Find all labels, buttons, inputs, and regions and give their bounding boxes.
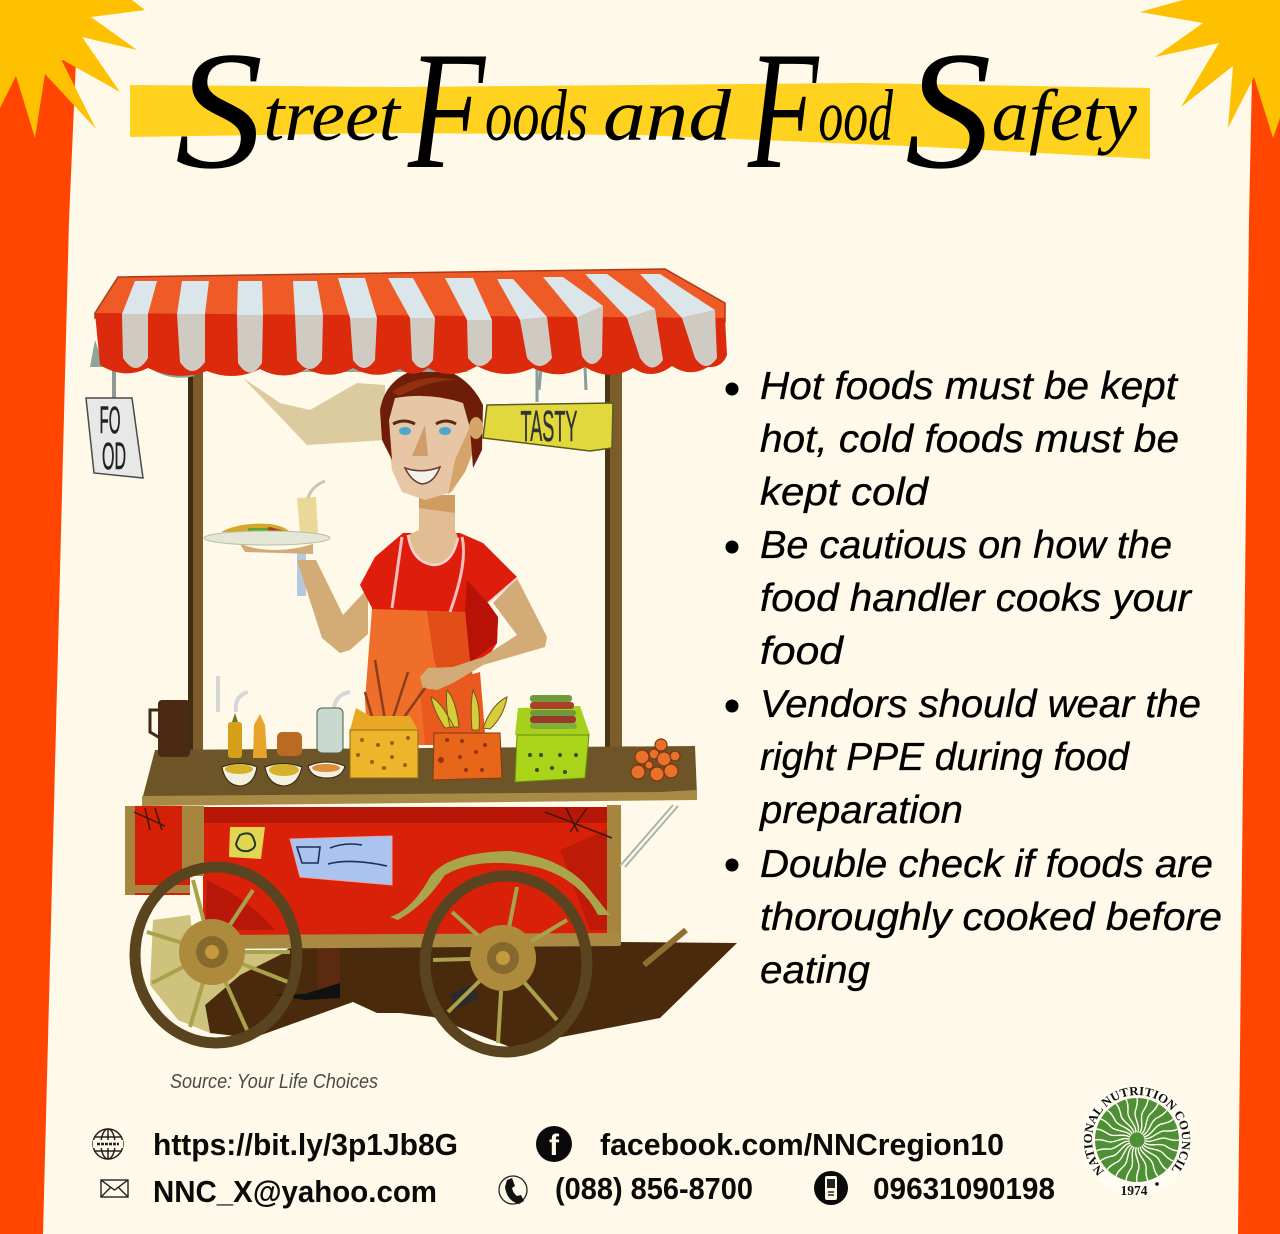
bowls [222, 762, 345, 786]
logo ring lettering: NATIONAL NUTRITION COUNCIL [1084, 1086, 1190, 1176]
right wheel [425, 876, 587, 1052]
tip 1: hot, cold foods must be [760, 418, 1179, 461]
tip 2: food [760, 630, 845, 673]
title: and [603, 75, 732, 156]
scratch marks on cart [134, 808, 612, 838]
tasty sign [483, 402, 613, 451]
tip 2: food handler cooks your [760, 577, 1193, 620]
pitcher [150, 700, 190, 757]
tabletop items [150, 660, 680, 786]
face [386, 396, 478, 500]
title: afety [992, 75, 1138, 156]
striped awning [90, 269, 727, 378]
tip 2: Be cautious on how the [760, 524, 1172, 567]
website link: https://bit.ly/3p1Jb8G [153, 1127, 458, 1162]
title: F [407, 18, 486, 205]
logo founding year: 1974 [1120, 1183, 1148, 1198]
tip 4: thoroughly cooked before [760, 896, 1222, 939]
facebook address: facebook.com/NNCregion10 [600, 1127, 1004, 1162]
left arm holding tray [297, 548, 368, 653]
tips list [726, 365, 1222, 992]
yellow note [229, 827, 265, 859]
tip 1: Hot foods must be kept [760, 365, 1179, 408]
left orange border [0, 60, 76, 1234]
backdrop shape behind vendor [243, 378, 385, 445]
orange tub [277, 732, 302, 756]
logo sunburst rays [1095, 1098, 1179, 1182]
sauce bottles [228, 713, 267, 758]
ground patch in left wheel [150, 915, 290, 1033]
title: oods [485, 75, 588, 156]
neck [408, 495, 458, 565]
title: treet [263, 75, 403, 156]
orange snack box [431, 690, 507, 780]
title: F [747, 18, 819, 205]
ear [469, 417, 483, 439]
title [175, 18, 1138, 205]
tip 2 [726, 524, 1193, 673]
hair [380, 367, 483, 468]
logo: national nutrition council [1081, 1084, 1193, 1198]
left post [188, 372, 203, 772]
right sunburst [1140, 0, 1280, 138]
email address: NNC_X@yahoo.com [153, 1174, 437, 1209]
title highlight bar [130, 83, 1150, 159]
tip 3: preparation [759, 789, 963, 832]
food cart illustration [86, 269, 737, 1052]
tip 3: Vendors should wear the [760, 683, 1201, 726]
tabletop [142, 746, 697, 806]
apron [365, 537, 486, 745]
hanging food sign [86, 368, 143, 478]
yellow snack box [350, 660, 425, 778]
left sunburst [0, 0, 145, 138]
tasty sign: TASTY [520, 402, 578, 451]
steam wisps [218, 676, 350, 712]
cart body [125, 805, 678, 949]
glass jar [317, 708, 343, 753]
awning stripes upper [122, 274, 715, 320]
hanging food sign: OD [102, 436, 126, 478]
green snack box with sandwiches [515, 695, 590, 782]
title: ood [818, 75, 894, 156]
pile of oranges [631, 739, 680, 781]
shadow stick [644, 930, 686, 965]
tip 1: kept cold [760, 471, 930, 514]
image source credit: Source: Your Life Choices [170, 1071, 378, 1093]
red shirt [360, 533, 517, 665]
blue card [290, 836, 392, 885]
icon: globe [93, 1129, 123, 1159]
tip 4 [726, 843, 1222, 992]
icon: telephone [499, 1176, 527, 1204]
icon: mail [101, 1180, 128, 1197]
wheel fender [390, 851, 610, 920]
icon: mobile phone [814, 1171, 848, 1205]
hanging food sign: FO [100, 400, 120, 442]
right arm [420, 578, 547, 690]
tip 4: eating [760, 949, 871, 992]
sign hooks under awning [537, 365, 586, 402]
left wheel [135, 867, 297, 1043]
icon: facebook: f [549, 1129, 560, 1162]
tip 3 [726, 683, 1201, 832]
awning stripes lower [122, 306, 717, 372]
shadow under cart [205, 942, 737, 1047]
title: S [905, 18, 992, 205]
tray with food and drink [204, 481, 330, 554]
awning underside shadow [90, 340, 525, 378]
right post [605, 372, 622, 782]
vendor legs and shoes [275, 948, 480, 1010]
title: S [175, 18, 263, 205]
tip 4: Double check if foods are [760, 843, 1213, 886]
mobile number: 09631090198 [873, 1171, 1055, 1206]
landline number: (088) 856-8700 [555, 1171, 753, 1206]
icon: facebook [536, 1126, 572, 1162]
vendor [204, 367, 547, 745]
tip 1 [726, 365, 1179, 514]
right orange border [1238, 60, 1280, 1234]
tip 3: right PPE during food [760, 736, 1131, 779]
